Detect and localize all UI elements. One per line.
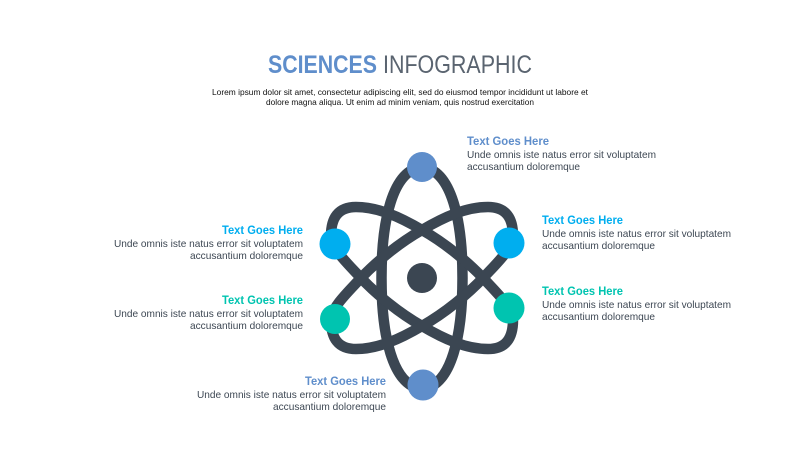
text block: bottom left: accusantium doloremque: [273, 402, 386, 413]
text block: upper right: [542, 213, 731, 252]
text block: upper right: accusantium doloremque: [542, 241, 655, 252]
text block: upper right: Text Goes Here: [542, 213, 623, 227]
electron: upper right: [494, 228, 524, 258]
electron: bottom: [408, 370, 438, 400]
text block: upper left: accusantium doloremque: [190, 251, 303, 262]
electron: lower left: [320, 304, 350, 334]
text block: lower right: Text Goes Here: [542, 284, 623, 298]
subtitle text: dolore magna aliqua. Ut enim ad minim veniam, quis nostrud exercitation: [266, 97, 534, 107]
text block: lower right: [542, 284, 731, 323]
text block: lower left: [114, 293, 303, 332]
text block: lower left: Unde omnis iste natus error sit voluptatem: [114, 309, 303, 320]
atom orbit: tilted up-right: [331, 207, 513, 349]
text block: bottom left: Text Goes Here: [305, 374, 386, 388]
text block: upper left: Text Goes Here: [222, 223, 303, 237]
text block: upper left: [114, 223, 303, 262]
text block: lower right: accusantium doloremque: [542, 312, 655, 323]
subtitle text: Lorem ipsum dolor sit amet, consectetur adipiscing elit, sed do eiusmod tempor incididunt ut labore et: [212, 87, 589, 97]
atom nucleus: [407, 263, 437, 293]
title: INFOGRAPHIC: [383, 51, 532, 79]
text block: upper left: Unde omnis iste natus error sit voluptatem: [114, 239, 303, 250]
text block: top right: accusantium doloremque: [467, 162, 580, 173]
atom orbit: tilted down-right: [331, 207, 513, 349]
text block: top right: Text Goes Here: [467, 134, 549, 148]
text block: upper right: Unde omnis iste natus error sit voluptatem: [542, 229, 731, 240]
atom diagram: [320, 152, 524, 400]
text block: lower left: accusantium doloremque: [190, 321, 303, 332]
text block: top right: Unde omnis iste natus error sit voluptatem: [467, 150, 656, 161]
electron: lower right: [494, 292, 524, 324]
text block: top right: [467, 134, 656, 173]
subtitle text: [212, 87, 589, 107]
text block: bottom left: [197, 374, 386, 413]
title: SCIENCES: [268, 51, 377, 79]
title: [268, 51, 532, 79]
electron: upper left: [320, 228, 350, 260]
text block: bottom left: Unde omnis iste natus error sit voluptatem: [197, 390, 386, 401]
atom orbit: vertical: [382, 167, 462, 389]
text block: lower left: Text Goes Here: [222, 293, 303, 307]
text block: lower right: Unde omnis iste natus error sit voluptatem: [542, 300, 731, 311]
electron: top: [407, 152, 437, 182]
